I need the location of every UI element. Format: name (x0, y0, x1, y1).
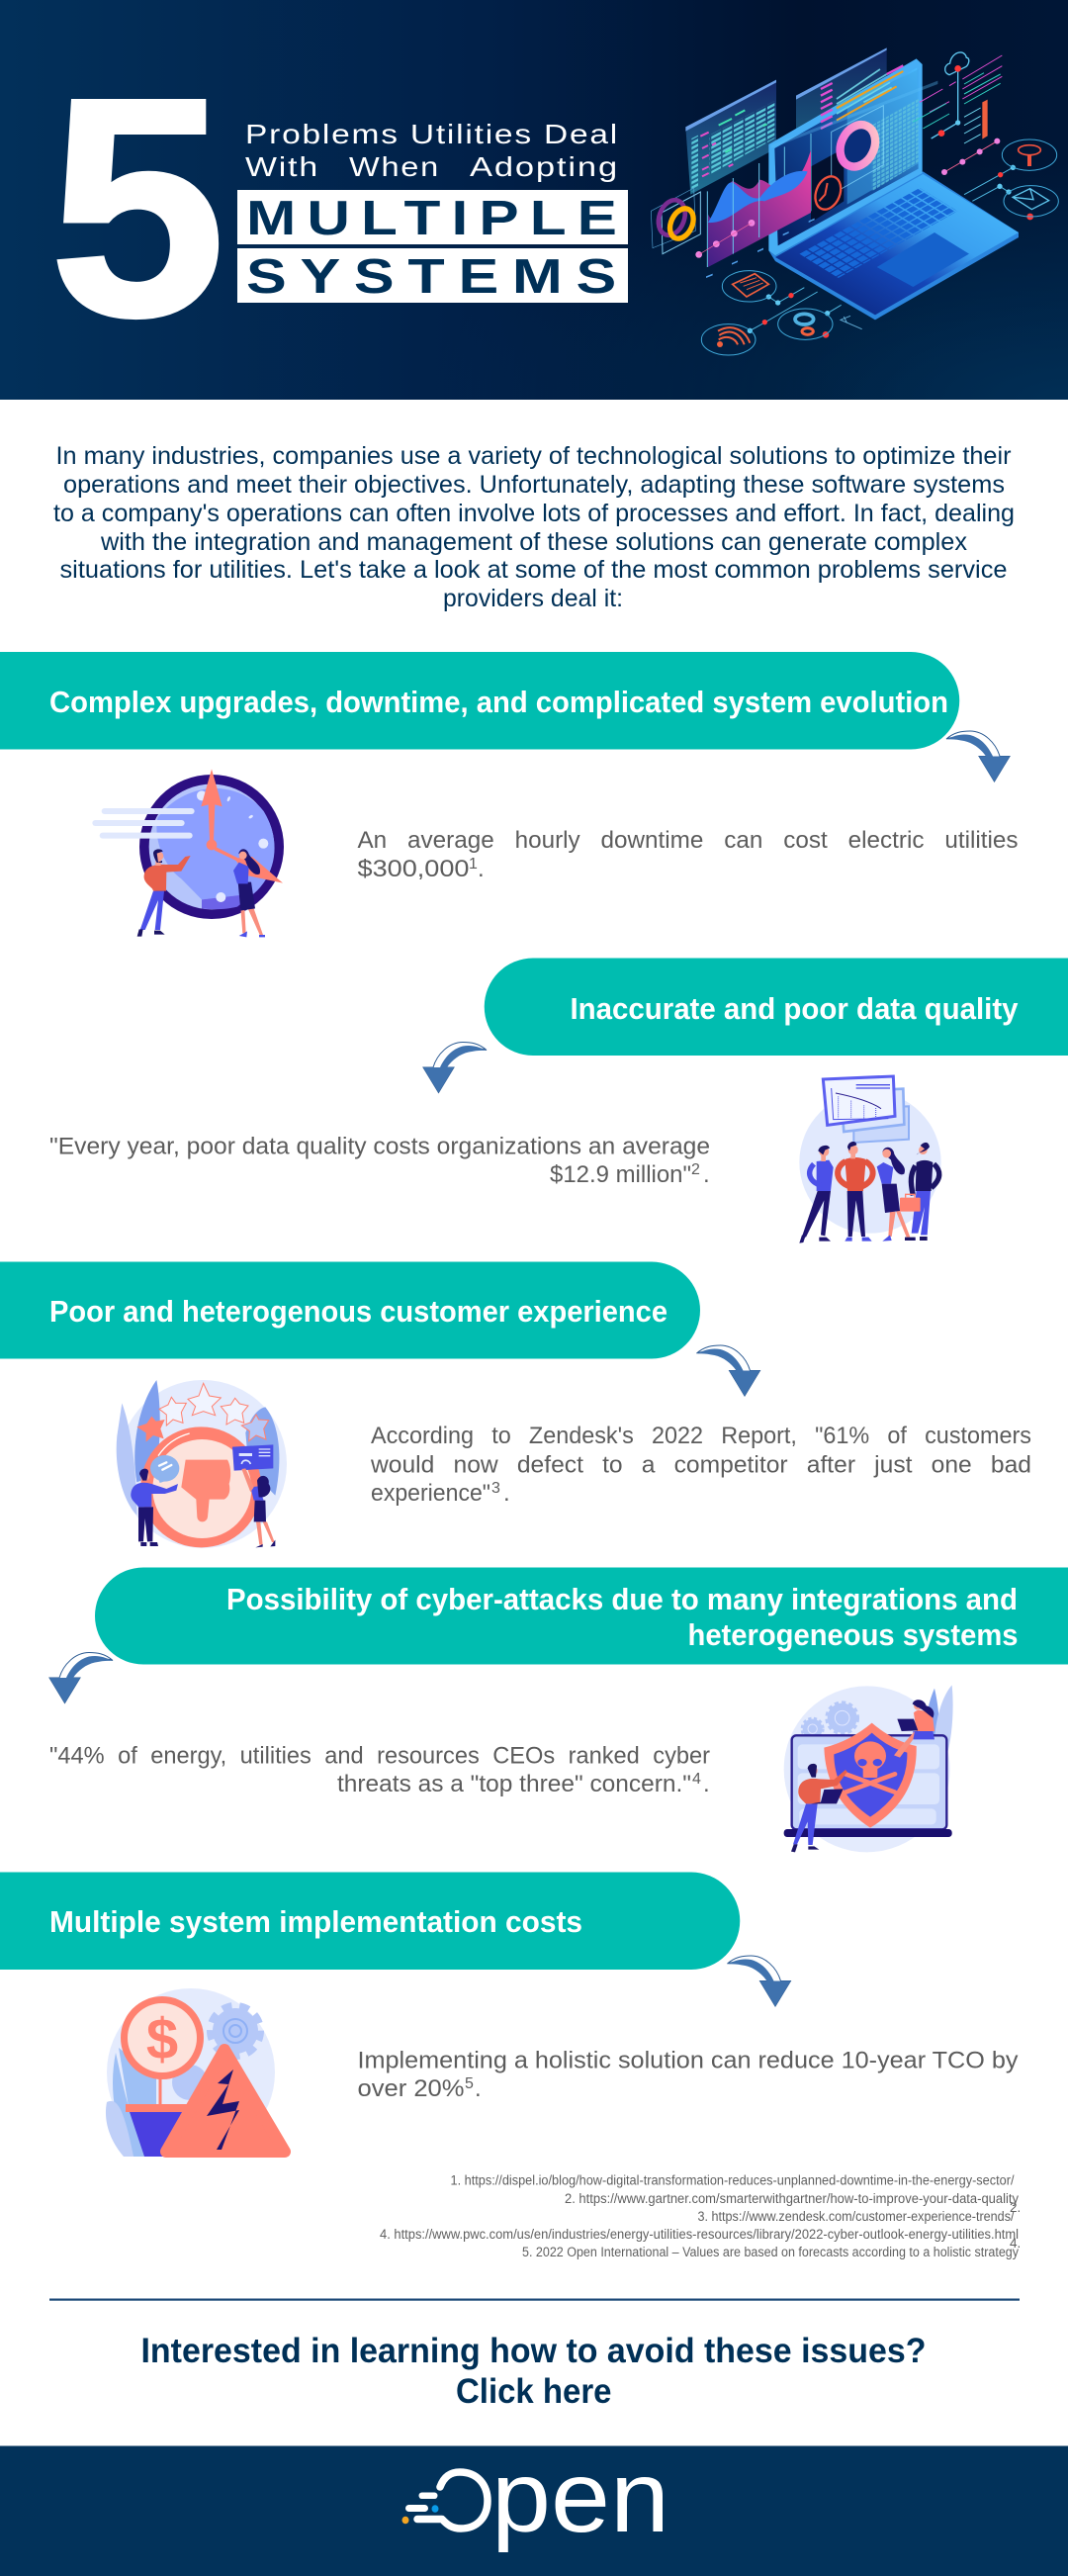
man (131, 1469, 178, 1546)
thumb icon (181, 1460, 230, 1521)
illustration: thumbs down rating (117, 1380, 287, 1548)
arrow 3 (696, 1345, 759, 1396)
section 3 heading pill: Poor and heterogenous customer experience (49, 1294, 668, 1329)
speech bubble (150, 1455, 179, 1483)
man (137, 849, 191, 937)
section 5 heading pill (0, 1872, 740, 1970)
body text 2: "Every year, poor data quality costs organizations an average (49, 1134, 710, 1159)
node: magnifier (1002, 139, 1057, 170)
flower pot (126, 2104, 187, 2157)
illustration: cost warning (106, 1988, 285, 2157)
clock gauge (811, 172, 846, 214)
section 4 heading pill: Possibility of cyber-attacks due to many integrations and (226, 1582, 1018, 1616)
body text 3: . (503, 1480, 510, 1507)
intro paragraph: situations for utilities. Let's take a look at some of the most common problems service (59, 556, 1007, 584)
body text 1 (358, 827, 1019, 882)
title box: systems: SYSTEMS (246, 250, 630, 304)
intro paragraph (53, 442, 1015, 612)
intro paragraph: with the integration and management of these solutions can generate complex (100, 528, 967, 556)
body text 5 (358, 2048, 1019, 2102)
header banner (0, 0, 1068, 400)
body text 4: threats as a "top three" concern." (337, 1771, 691, 1797)
rating card (232, 1444, 273, 1471)
intro paragraph: to a company's operations can often involve lots of processes and effort. In fact, dealing (53, 500, 1015, 527)
skull and crossbones (846, 1741, 895, 1793)
person 4 (900, 1143, 939, 1241)
node: gears (778, 309, 833, 339)
body text 4 (49, 1743, 710, 1797)
title line 1: Problems Utilities Deal (245, 119, 619, 149)
body text 3: 3 (491, 1480, 500, 1497)
body text 2: $12.9 million" (550, 1161, 691, 1188)
laptop (784, 1735, 952, 1837)
area chart (708, 150, 811, 267)
warning triangle (166, 2050, 285, 2152)
intro paragraph: In many industries, companies use a variety of technological solutions to optimize their (55, 442, 1011, 470)
body text 3: According to Zendesk's 2022 Report, "61% of customers (371, 1423, 1031, 1449)
node: document (722, 271, 776, 302)
arrow 4 (49, 1652, 113, 1703)
illustration: clock with two people (92, 769, 284, 937)
call to action: Interested in learning how to avoid these issues? (140, 2332, 926, 2370)
yellow donut (651, 188, 700, 254)
section 2 heading pill (485, 958, 1068, 1056)
body text 2: 2 (691, 1161, 700, 1178)
arrow 2 (423, 1043, 487, 1092)
briefcase (900, 1194, 921, 1212)
man (791, 1764, 847, 1852)
body text 5: 5 (465, 2075, 474, 2092)
footnotes: 5. 2022 Open International – Values are based on forecasts according to a holistic strategy (522, 2245, 1019, 2259)
person 2 (838, 1142, 873, 1242)
arrow 1 (946, 731, 1010, 782)
illustration: team with chart (799, 1076, 941, 1243)
coin: $ (146, 2007, 178, 2071)
woman (241, 1468, 275, 1547)
section 4 heading pill: heterogeneous systems (688, 1617, 1019, 1652)
title line 2: With (245, 151, 319, 182)
person 1 (799, 1146, 834, 1243)
body text 4: 4 (692, 1771, 701, 1788)
body text 1: An average hourly downtime can cost electric utilities (358, 827, 1019, 854)
big number 5: 5 (49, 34, 225, 381)
body text 5: . (475, 2075, 482, 2102)
call to action (140, 2332, 926, 2411)
body text 1: . (478, 856, 485, 882)
gear (213, 2008, 258, 2054)
body text 3 (370, 1423, 1031, 1507)
body text 2 (49, 1134, 710, 1188)
coin (121, 1996, 204, 2107)
node: wifi (701, 324, 756, 355)
illustration: isometric laptop dashboard (651, 47, 1058, 355)
section 1 heading pill: Complex upgrades, downtime, and complicated system evolution (49, 685, 948, 719)
shield (824, 1723, 917, 1828)
footnotes: 1. https://dispel.io/blog/how-digital-transformation-reduces-unplanned-downtime-in-the-energy-sector/ (451, 2172, 1015, 2188)
footnotes: 2. https://www.gartner.com/smarterwithgartner/how-to-improve-your-data-quality (565, 2191, 1019, 2206)
connection lines and nodes (750, 141, 1013, 330)
body text 1: $300,000 (358, 856, 469, 882)
body text 3: experience" (371, 1480, 490, 1507)
node: envelope (1004, 186, 1058, 217)
woman (233, 849, 265, 937)
logo: Open: pen (491, 2440, 669, 2553)
section 2 heading pill: Inaccurate and poor data quality (570, 991, 1019, 1026)
body text 5: Implementing a holistic solution can reduce 10-year TCO by (358, 2048, 1019, 2073)
person 3 (877, 1148, 916, 1242)
footer band (0, 2440, 1068, 2576)
donut chart (834, 119, 882, 172)
section 1 heading pill (0, 652, 959, 750)
body text 5: over 20% (358, 2075, 465, 2102)
footnotes (380, 2172, 1021, 2259)
section 5 heading pill: Multiple system implementation costs (49, 1904, 582, 1939)
intro paragraph: operations and meet their objectives. Unfortunately, adapting these software systems (63, 471, 1005, 499)
code lines right (920, 55, 1002, 112)
footnotes: 4. (1010, 2236, 1021, 2251)
title line 2: Adopting (470, 151, 619, 182)
section 3 heading pill (0, 1262, 700, 1359)
title line 2 (245, 151, 619, 182)
footnotes: 4. https://www.pwc.com/us/en/industries/energy-utilities-resources/library/2022-cyber-outlook-energy-utilities.html (380, 2227, 1019, 2242)
gears (803, 1703, 857, 1739)
call to action: Click here (456, 2372, 611, 2411)
footnotes: 2. (1010, 2200, 1021, 2215)
body text 3: would now defect to a competitor after just one bad (370, 1452, 1031, 1478)
title box: multiple: MULTIPLE (246, 192, 628, 245)
footnotes: 3. https://www.zendesk.com/customer-experience-trends/ (698, 2209, 1015, 2224)
cloud node (932, 52, 969, 138)
intro paragraph: providers deal it: (443, 585, 623, 612)
body text 4: . (703, 1771, 710, 1797)
body text 4: "44% of energy, utilities and resources CEOs ranked cyber (49, 1743, 710, 1769)
arrow 5 (728, 1956, 791, 2006)
body text 2: . (703, 1161, 710, 1188)
logo: Open (401, 2440, 669, 2553)
body text 1: 1 (469, 856, 478, 873)
section 4 heading pill (95, 1567, 1068, 1664)
illustration: cyber attack shield (784, 1685, 953, 1852)
title line 2: When (349, 151, 440, 182)
woman (894, 1700, 934, 1758)
